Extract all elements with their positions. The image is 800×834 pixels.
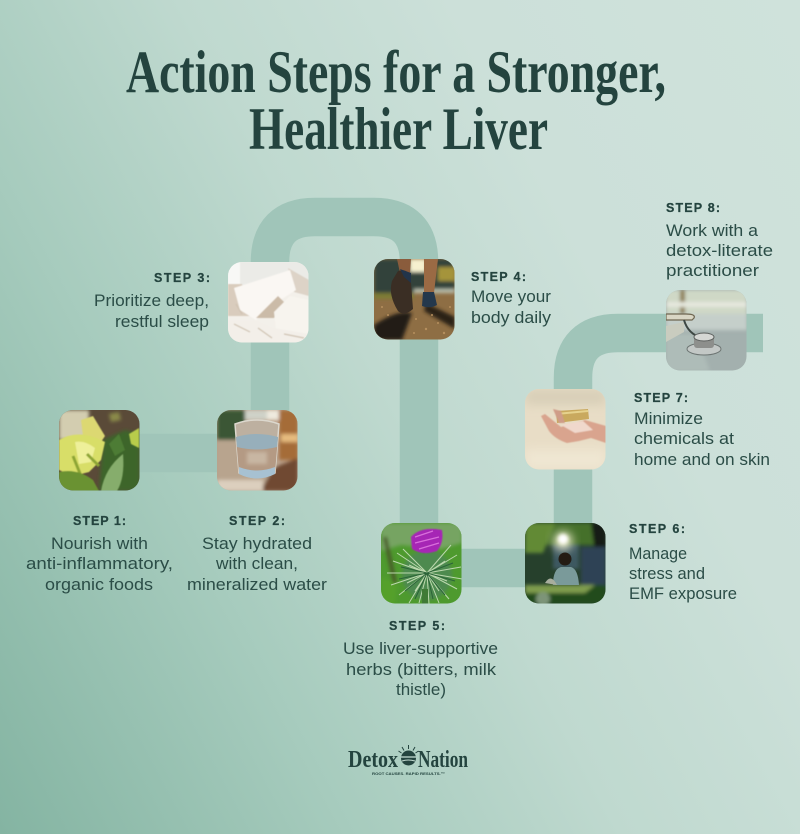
step 5 text: Use liver-supportive xyxy=(343,640,498,658)
step 7 text: STEP 7: xyxy=(634,391,688,405)
image: runner's legs on a path (step 4) xyxy=(374,259,455,340)
image: person meditating in a park (step 6) xyxy=(525,523,606,606)
step 8 text: practitioner xyxy=(666,262,760,280)
title xyxy=(126,39,666,162)
step 3 text: restful sleep xyxy=(115,313,209,331)
step 6 text: stress and xyxy=(629,565,705,583)
step 8 text: detox-literate xyxy=(666,242,773,260)
step 4 text: STEP 4: xyxy=(471,270,526,284)
step 3 text: STEP 3: xyxy=(154,271,210,285)
step 2 text: mineralized water xyxy=(187,576,328,594)
image: white bed and pillows (step 3) xyxy=(228,262,309,343)
step 4 text: body daily xyxy=(471,309,552,327)
step 1 text: STEP 1: xyxy=(73,514,126,528)
image: leafy greens (step 1) xyxy=(59,410,140,491)
step 8 text xyxy=(666,201,773,280)
step 1 text: anti-inflammatory, xyxy=(26,555,173,573)
step 1 text xyxy=(26,514,173,594)
step 7 text: Minimize xyxy=(634,410,703,428)
step 8 text: STEP 8: xyxy=(666,201,720,215)
step 3 text xyxy=(94,271,210,331)
image: glass of water (step 2) xyxy=(217,410,298,491)
step 2 text: STEP 2: xyxy=(229,514,285,528)
step 7 text: home and on skin xyxy=(634,451,770,469)
step 2 text: with clean, xyxy=(215,555,298,573)
logo: Detox Nation: Nation xyxy=(418,747,468,773)
winding path connecting the steps xyxy=(100,217,763,568)
step 4 text: Move your xyxy=(471,288,552,306)
step 6 text: STEP 6: xyxy=(629,522,685,536)
title: Healthier Liver xyxy=(249,96,548,162)
image: hands holding soap (step 7) xyxy=(525,389,606,470)
step 2 text: Stay hydrated xyxy=(202,535,312,553)
step 5 text: herbs (bitters, milk xyxy=(346,661,497,679)
step 8 text: Work with a xyxy=(666,222,759,240)
step 6 text xyxy=(629,522,737,603)
logo: Detox Nation: ROOT CAUSES. RAPID RESULTS.™ xyxy=(372,771,445,776)
step 6 text: EMF exposure xyxy=(629,585,737,603)
step 7 text: chemicals at xyxy=(634,430,734,448)
logo: Detox Nation xyxy=(348,745,468,776)
step 7 text xyxy=(634,391,770,469)
step 1 text: Nourish with xyxy=(51,535,148,553)
step 2 text xyxy=(187,514,328,594)
step 5 text xyxy=(343,619,498,699)
image: milk thistle flower (step 5) xyxy=(381,523,462,604)
image: stethoscope on a desk (step 8) xyxy=(666,290,747,371)
step 3 text: Prioritize deep, xyxy=(94,292,209,310)
step 4 text xyxy=(471,270,552,327)
step 6 text: Manage xyxy=(629,545,687,563)
logo: Detox Nation: Detox xyxy=(348,747,398,773)
step 5 text: STEP 5: xyxy=(389,619,445,633)
step 1 text: organic foods xyxy=(45,576,153,594)
step 5 text: thistle) xyxy=(396,681,446,699)
